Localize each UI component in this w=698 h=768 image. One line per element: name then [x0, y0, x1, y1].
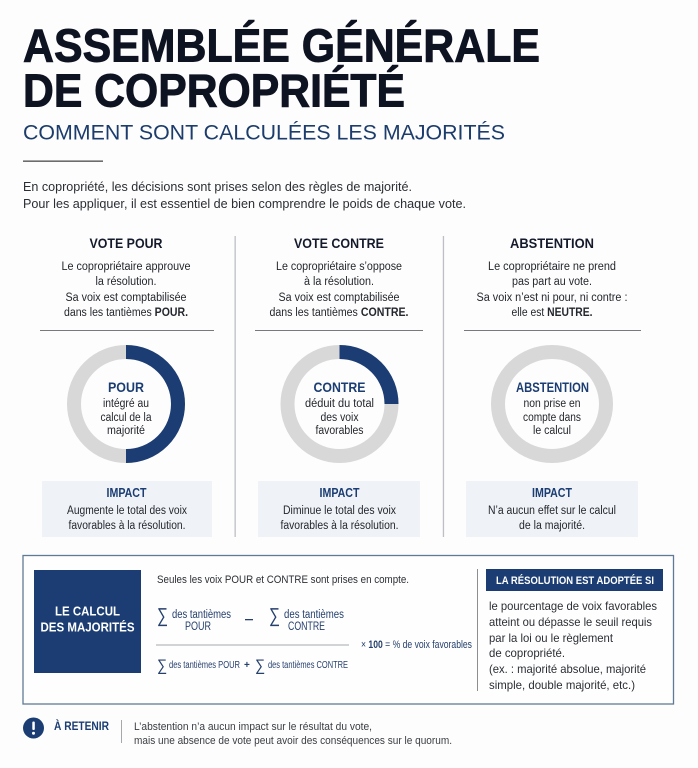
donut chart: pour: calcul de la — [100, 412, 152, 424]
adoption condition: (ex. : majorité absolue, majorité — [489, 662, 646, 676]
description: elle est NEUTRE. — [512, 307, 592, 319]
formula: CONTRE — [288, 621, 325, 633]
formula — [156, 574, 472, 674]
description: Le copropriétaire s’oppose — [276, 261, 402, 273]
impact box: favorables à la résolution. — [280, 520, 398, 532]
adoption condition: de copropriété. — [489, 646, 565, 660]
panel: vote pour — [40, 235, 214, 537]
donut chart: abstention — [498, 352, 606, 456]
impact box: Augmente le total des voix — [67, 505, 187, 517]
impact box — [258, 481, 420, 537]
callout: à retenir — [23, 718, 452, 747]
description: Le copropriétaire approuve — [62, 261, 190, 273]
description: la résolution. — [96, 276, 156, 288]
icon: exclamation — [23, 718, 44, 738]
heading: ABSTENTION — [510, 235, 594, 251]
adoption condition: LA RÉSOLUTION EST ADOPTÉE SI — [496, 574, 654, 587]
impact box: de la majorité. — [519, 520, 585, 532]
formula: des tantièmes — [172, 609, 231, 621]
panel: calculation — [23, 556, 674, 704]
intro text: Pour les appliquer, il est essentiel de bien comprendre le poids de chaque vote. — [23, 197, 466, 211]
formula: des tantièmes — [284, 609, 344, 621]
adoption condition — [486, 569, 663, 692]
donut chart: abstention: le calcul — [533, 425, 571, 437]
donut chart: abstention: compte dans — [523, 412, 581, 424]
panel: vote contre — [255, 235, 423, 537]
description: Sa voix est comptabilisée — [66, 292, 186, 304]
impact box: IMPACT — [532, 486, 572, 500]
adoption condition: le pourcentage de voix favorables — [489, 599, 657, 613]
navy label block: LE CALCUL — [55, 604, 120, 618]
description — [62, 261, 190, 319]
impact box: IMPACT — [320, 486, 360, 500]
description: Sa voix n’est ni pour, ni contre : — [476, 292, 628, 304]
formula: des tantièmes POUR — [169, 660, 240, 671]
formula: POUR — [185, 621, 211, 633]
title — [23, 20, 540, 117]
navy label block: DES MAJORITÉS — [40, 620, 134, 634]
donut chart: abstention: non prise en — [524, 398, 580, 410]
impact box: IMPACT — [106, 486, 147, 500]
donut chart: pour: intégré au — [103, 398, 149, 410]
donut chart: contre: déduit du total — [305, 398, 374, 410]
formula: ∑ — [255, 658, 265, 674]
formula: × 100 = % de voix favorables — [361, 639, 472, 651]
title: ASSEMBLÉE GÉNÉRALE — [23, 20, 540, 72]
navy label block — [34, 570, 141, 673]
heading: VOTE POUR — [90, 235, 162, 251]
description: pas part au vote. — [512, 276, 592, 288]
callout: à retenir: mais une absence de vote peut avoir des conséquences sur le quorum. — [134, 735, 452, 747]
adoption condition: par la loi ou le règlement — [489, 631, 614, 645]
intro text — [23, 180, 466, 211]
impact box — [42, 481, 212, 537]
adoption condition: atteint ou dépasse le seuil requis — [489, 615, 652, 629]
callout: à retenir: À RETENIR — [54, 720, 110, 733]
formula: ∑ — [157, 605, 168, 627]
description: Le copropriétaire ne prend — [488, 261, 616, 273]
description — [270, 261, 408, 319]
callout: à retenir: L’abstention n’a aucun impact sur le résultat du vote, — [134, 721, 372, 733]
donut chart: contre: CONTRE — [314, 379, 366, 395]
formula: ∑ — [269, 605, 280, 627]
subtitle: COMMENT SONT CALCULÉES LES MAJORITÉS — [23, 120, 505, 144]
description: dans les tantièmes CONTRE. — [270, 307, 408, 319]
heading: VOTE CONTRE — [294, 235, 384, 251]
description: Sa voix est comptabilisée — [278, 292, 400, 304]
impact box: favorables à la résolution. — [68, 520, 186, 532]
title: DE COPROPRIÉTÉ — [23, 65, 405, 117]
impact box: Diminue le total des voix — [283, 505, 396, 517]
description — [476, 261, 628, 319]
donut chart: contre: favorables — [316, 425, 364, 437]
panel: abstention — [464, 235, 641, 537]
formula: des tantièmes CONTRE — [268, 660, 348, 671]
header — [23, 20, 540, 211]
donut chart: abstention: ABSTENTION — [516, 379, 589, 395]
adoption condition: simple, double majorité, etc.) — [489, 678, 635, 692]
donut chart: contre: des voix — [320, 412, 359, 424]
donut chart: pour: majorité — [107, 425, 145, 437]
formula: Seules les voix POUR et CONTRE sont prises en compte. — [157, 574, 409, 586]
description: à la résolution. — [304, 276, 374, 288]
donut chart: pour — [74, 352, 178, 456]
impact box: N’a aucun effet sur le calcul — [488, 505, 616, 517]
donut chart: pour: POUR — [108, 379, 144, 395]
donut chart: contre — [288, 352, 392, 456]
intro text: En copropriété, les décisions sont prises selon des règles de majorité. — [23, 180, 412, 194]
formula: ∑ — [157, 658, 167, 674]
formula: + — [244, 660, 250, 671]
impact box — [466, 481, 638, 537]
description: dans les tantièmes POUR. — [64, 307, 188, 319]
